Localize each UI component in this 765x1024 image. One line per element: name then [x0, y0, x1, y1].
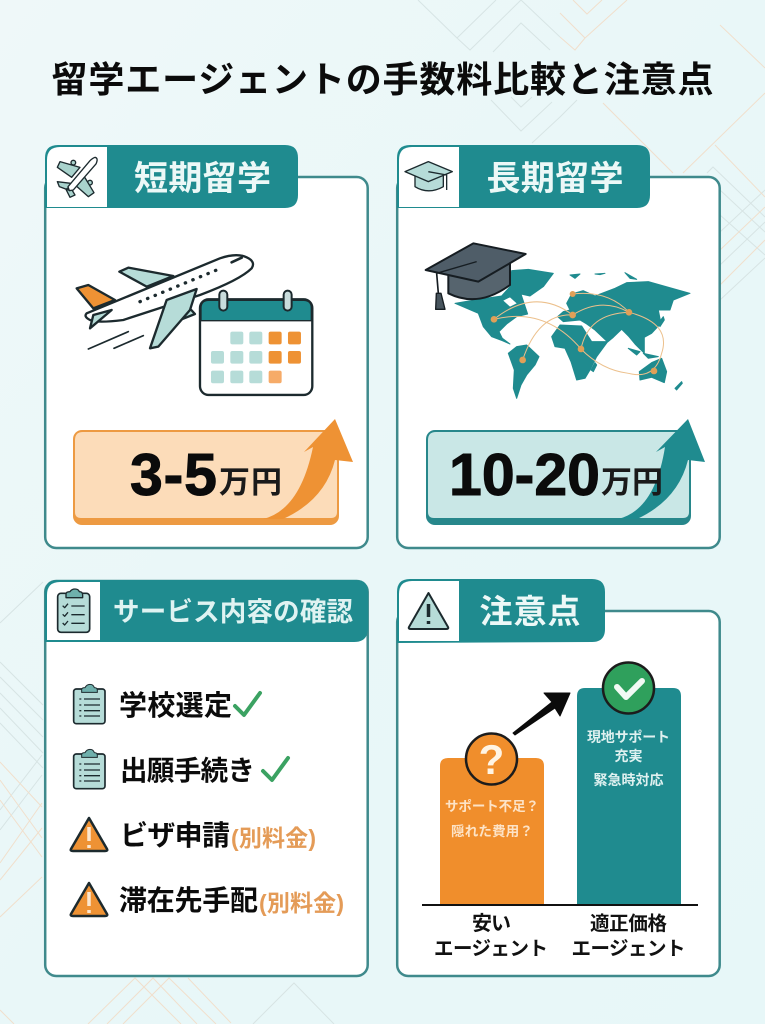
arrow: rising cost [618, 419, 705, 519]
panel: service checklist [45, 580, 368, 976]
price box: 3-5万円: 3-5 [130, 442, 217, 508]
panel header: long-term study [397, 145, 650, 208]
bar: fair price agent [577, 688, 681, 904]
icon: small graduation cap [405, 162, 452, 191]
icon: small airplane [57, 157, 97, 197]
panel: cautions [397, 579, 720, 976]
list item: school selection [74, 684, 260, 724]
icon: warning triangle [71, 883, 107, 916]
illustration: world map with routes [455, 269, 690, 398]
icon: warning triangle [71, 818, 107, 851]
label: cheap agent: 安い [472, 912, 511, 935]
bar: cheap agent [440, 758, 544, 904]
price box: 3-5万円: 万円 [219, 465, 282, 500]
bar: cheap agent: 隠れた費用？ [451, 823, 533, 839]
list item: school selection: 学校選定 [119, 690, 232, 721]
price box: 10-20万円: 10-20 [449, 442, 600, 508]
bar: fair price agent: 充実 [614, 748, 642, 764]
panel header: service checklist: サービス内容の確認 [113, 597, 354, 627]
illustration: airplane taking off [77, 255, 253, 349]
list item: accommodation: (別料金) [259, 890, 344, 916]
panel: long-term study [397, 145, 720, 548]
arrow: rising cost [263, 419, 353, 519]
label: fair price agent: 適正価格 [590, 913, 667, 935]
bar: fair price agent: 現地サポート [587, 729, 670, 745]
icon: clipboard [74, 684, 105, 724]
list item: visa application: (別料金) [231, 825, 316, 851]
bar: cheap agent: サポート不足？ [445, 799, 539, 814]
panel header: cautions: 注意点 [480, 593, 580, 630]
icon: check [263, 758, 288, 780]
panel header: cautions [397, 579, 605, 643]
list item: accommodation: 滞在先手配 [119, 885, 258, 916]
icon: question mark circle: ? [479, 736, 504, 783]
icon: clipboard [74, 749, 105, 789]
label: cheap agent [434, 912, 548, 960]
label: cheap agent: エージェント [434, 938, 548, 960]
label: fair price agent [572, 913, 686, 960]
panel header: long-term study: 長期留学 [486, 160, 624, 198]
bar: fair price agent: 緊急時対応 [594, 772, 664, 788]
illustration: calendar [200, 291, 312, 395]
list item: visa application: ビザ申請 [120, 820, 230, 851]
icon: checklist clipboard [58, 589, 90, 632]
icon: check circle [603, 662, 654, 714]
list item: accommodation [71, 883, 344, 916]
baseline axis [422, 904, 698, 906]
list item: application procedure: 出願手続き [120, 755, 255, 786]
price box: 10-20万円: 万円 [601, 465, 663, 500]
panel: short-term study [45, 145, 368, 548]
title: 留学エージェントの手数料比較と注意点 [52, 59, 714, 100]
panel header: service checklist [45, 580, 368, 642]
icon: check [235, 693, 260, 715]
price box: 3-5万円 [73, 419, 353, 525]
illustration: graduation cap [426, 243, 526, 309]
panel header: short-term study: 短期留学 [134, 160, 271, 198]
list item: application procedure [74, 749, 288, 789]
icon: caution triangle [409, 593, 448, 629]
label: fair price agent: エージェント [572, 938, 686, 960]
price box: 10-20万円 [426, 419, 705, 525]
icon: question mark circle [466, 734, 517, 784]
list item: visa application [71, 818, 316, 851]
panel header: short-term study [45, 145, 298, 208]
arrow: cheap to fair price [513, 693, 570, 735]
